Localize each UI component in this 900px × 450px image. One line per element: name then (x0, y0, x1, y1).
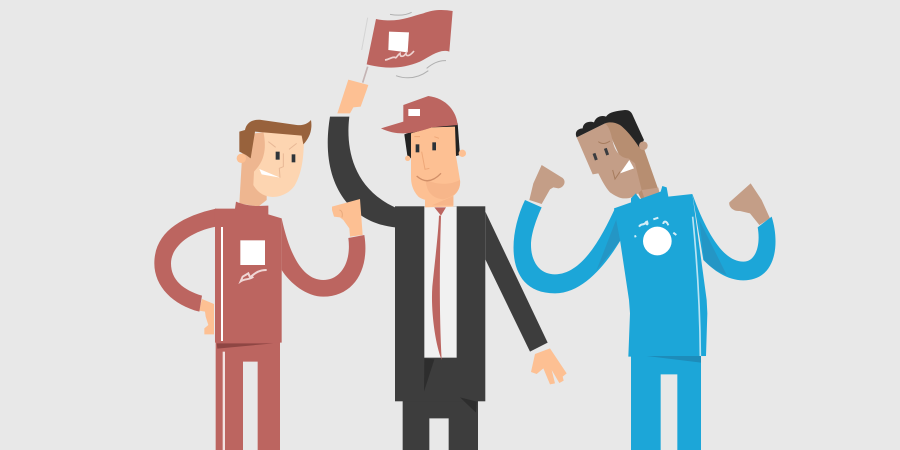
jacket (395, 206, 485, 401)
trousers (403, 400, 478, 450)
trousers (631, 355, 701, 450)
jacket (614, 186, 707, 357)
lowered hand (531, 348, 567, 384)
hand on hip (199, 299, 214, 334)
right arm (692, 194, 776, 280)
man in red tracksuit (154, 120, 365, 450)
jacket (215, 202, 282, 343)
flag (362, 10, 453, 83)
right fist (729, 183, 770, 225)
right arm shadow (699, 220, 727, 275)
waist shadow (647, 356, 701, 363)
lowered arm (485, 212, 548, 352)
neck and head (576, 110, 660, 200)
jacket stripe (693, 217, 700, 356)
shirt and tie (424, 206, 477, 413)
left arm (154, 209, 216, 312)
trousers (216, 342, 280, 450)
raised arm (328, 117, 395, 227)
raised hand (337, 80, 368, 113)
right arm (282, 218, 365, 297)
head (237, 120, 311, 207)
badge circle (643, 227, 672, 255)
badge (240, 240, 265, 265)
head with cap (381, 96, 466, 207)
man in suit holding flag (328, 10, 567, 450)
raised fist (332, 199, 363, 237)
left arm shadow (597, 218, 621, 270)
waist shadow (217, 343, 273, 349)
logo squiggle (241, 270, 267, 281)
left fist (529, 165, 565, 204)
logo marks (635, 218, 676, 237)
man in blue tracksuit (514, 110, 776, 450)
left arm (514, 200, 621, 293)
jacket stripe (221, 227, 223, 341)
trouser stripe (223, 352, 225, 450)
